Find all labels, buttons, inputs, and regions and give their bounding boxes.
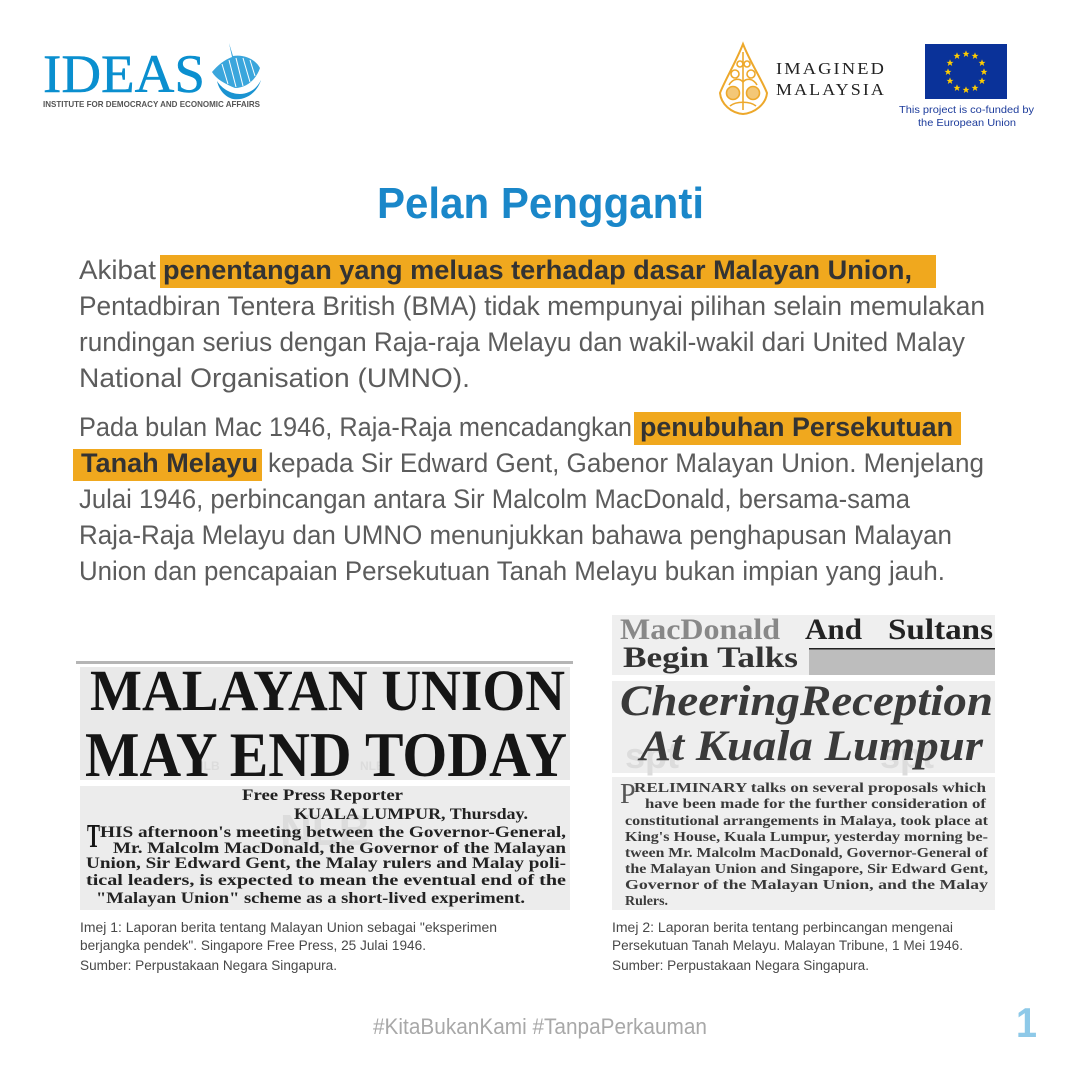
newspaper clipping: Malayan Union may end today: "Malayan Union" scheme as a short-lived experiment. (96, 890, 525, 907)
newspaper clipping: MacDonald and Sultans begin talks: Begin Talks (623, 641, 798, 674)
newspaper clipping: Malayan Union may end today: Mr. Malcolm MacDonald, the Governor of the Malayan (113, 840, 566, 857)
caption: image 1: Sumber: Perpustakaan Negara Singapura. (80, 958, 337, 973)
newspaper clipping: MacDonald and Sultans begin talks: MacDonald (620, 613, 780, 646)
newspaper clipping: Malayan Union may end today: MAY END TODAY (85, 719, 567, 790)
newspaper clipping: Malayan Union may end today (76, 658, 573, 910)
text block: paragraph 1: Akibat (79, 255, 157, 285)
newspaper clipping: Malayan Union may end today: NLB (195, 759, 220, 773)
newspaper clipping: MacDonald and Sultans begin talks: have been made for the further consideration of (645, 797, 986, 812)
newspaper clipping: Malayan Union may end today: NLB (360, 759, 385, 773)
newspaper clipping: Malayan Union may end today: NLB (280, 806, 370, 855)
text block: paragraph 1: penentangan yang meluas terhadap dasar Malayan Union, (163, 255, 912, 285)
page number: 1 (1016, 999, 1037, 1046)
logo: IDEAS (43, 43, 261, 109)
newspaper clipping: Malayan Union may end today: MALAYAN UNION (90, 658, 565, 723)
newspaper clipping: Malayan Union may end today: Free Press Reporter (242, 787, 403, 804)
newspaper clipping: MacDonald and Sultans begin talks (612, 613, 995, 910)
logo: EU flag with co-funding note: the European Union (918, 117, 1016, 129)
text block: paragraph 1: Pentadbiran Tentera British (BMA) tidak mempunyai pilihan selain memulakan (79, 291, 985, 321)
text block: paragraph 2: Union dan pencapaian Persekutuan Tanah Melayu bukan impian yang jauh. (79, 556, 945, 586)
caption: image 1 (80, 920, 497, 973)
newspaper clipping: Malayan Union may end today: Union, Sir Edward Gent, the Malay rulers and Malay poli- (86, 855, 566, 872)
newspaper clipping: MacDonald and Sultans begin talks: Governor of the Malayan Union, and the Malay (625, 878, 988, 893)
text block: paragraph 1: rundingan serius dengan Raja-raja Melayu dan wakil-wakil dari United Malay (79, 327, 965, 357)
icon: gunungan (720, 44, 767, 114)
logo: IDEAS: IDEAS (43, 44, 205, 104)
newspaper clipping: MacDonald and Sultans begin talks: Rulers. (625, 894, 668, 909)
newspaper clipping: MacDonald and Sultans begin talks: tween Mr. Malcolm MacDonald, Governor-General of (625, 846, 988, 861)
logo: IDEAS: INSTITUTE FOR DEMOCRACY AND ECONOMIC AFFAIRS (43, 99, 260, 109)
newspaper clipping: Malayan Union may end today: T (87, 818, 100, 855)
text block: paragraph 1: National Organisation (UMNO). (79, 363, 470, 393)
logo: Imagined Malaysia: IMAGINED (776, 59, 886, 78)
caption: image 1: Imej 1: Laporan berita tentang Malayan Union sebagai "eksperimen (80, 920, 497, 935)
highlight: opposition to Malayan Union (160, 255, 936, 288)
newspaper clipping: MacDonald and Sultans begin talks: And (805, 613, 862, 646)
highlight: formation of the Federation, line 1 (634, 412, 961, 445)
text block: paragraph 1 (79, 255, 985, 393)
newspaper clipping: MacDonald and Sultans begin talks: At Kuala Lumpur (637, 723, 984, 770)
logo: Imagined Malaysia: MALAYSIA (776, 80, 886, 99)
text block: paragraph 2: penubuhan Persekutuan (640, 412, 953, 442)
newspaper clipping: Malayan Union may end today: HIS afternoon's meeting between the Governor-General, (100, 824, 566, 841)
highlight: formation of the Federation, line 2 (73, 449, 262, 481)
newspaper clipping: MacDonald and Sultans begin talks: Sultans (888, 613, 993, 646)
newspaper clipping: MacDonald and Sultans begin talks: constitutional arrangements in Malaya, took place at (625, 814, 988, 829)
caption: image 2: Imej 2: Laporan berita tentang perbincangan mengenai (612, 920, 953, 935)
newspaper clipping: Malayan Union may end today: tical leaders, is expected to mean the eventual end of the (86, 872, 566, 889)
newspaper clipping: MacDonald and Sultans begin talks: CheeringReception (620, 678, 993, 725)
newspaper clipping: MacDonald and Sultans begin talks: King's House, Kuala Lumpur, yesterday morning be- (625, 830, 988, 845)
newspaper clipping: MacDonald and Sultans begin talks: spt (625, 735, 679, 776)
text block: paragraph 2: Raja-Raja Melayu dan UMNO menunjukkan bahawa penghapusan Malayan (79, 520, 952, 550)
logo: Imagined Malaysia (720, 44, 886, 114)
caption: image 2: Persekutuan Tanah Melayu. Malayan Tribune, 1 Mei 1946. (612, 938, 963, 953)
newspaper clipping: MacDonald and Sultans begin talks: the Malayan Union and Singapore, Sir Edward Gent, (625, 862, 988, 877)
newspaper clipping: MacDonald and Sultans begin talks: spt (880, 735, 934, 776)
text block: paragraph 2: kepada Sir Edward Gent, Gabenor Malayan Union. Menjelang (268, 448, 984, 478)
caption: image 2: Sumber: Perpustakaan Negara Singapura. (612, 958, 869, 973)
newspaper clipping: MacDonald and Sultans begin talks: RELIMINARY talks on several proposals which (634, 781, 986, 796)
newspaper clipping: Malayan Union may end today: KUALA LUMPUR, Thursday. (294, 806, 528, 823)
icon: IDEAS bird (212, 43, 261, 99)
text block: paragraph 2: Pada bulan Mac 1946, Raja-Raja mencadangkan (79, 412, 632, 442)
caption: image 2 (612, 920, 963, 973)
text block: paragraph 2: Julai 1946, perbincangan antara Sir Malcolm MacDonald, bersama-sama (79, 484, 911, 514)
logo: EU flag with co-funding note (899, 44, 1035, 129)
text block: paragraph 2 (73, 412, 984, 586)
text block: paragraph 2: Tanah Melayu (81, 448, 258, 478)
caption: image 1: berjangka pendek". Singapore Free Press, 25 Julai 1946. (80, 938, 426, 953)
icon: EU flag (925, 44, 1007, 99)
hashtags: #KitaBukanKami #TanpaPerkauman (373, 1014, 707, 1039)
logo: EU flag with co-funding note: This project is co-funded by (899, 104, 1035, 116)
title: Pelan Pengganti (377, 179, 704, 228)
newspaper clipping: MacDonald and Sultans begin talks: P (620, 779, 636, 810)
